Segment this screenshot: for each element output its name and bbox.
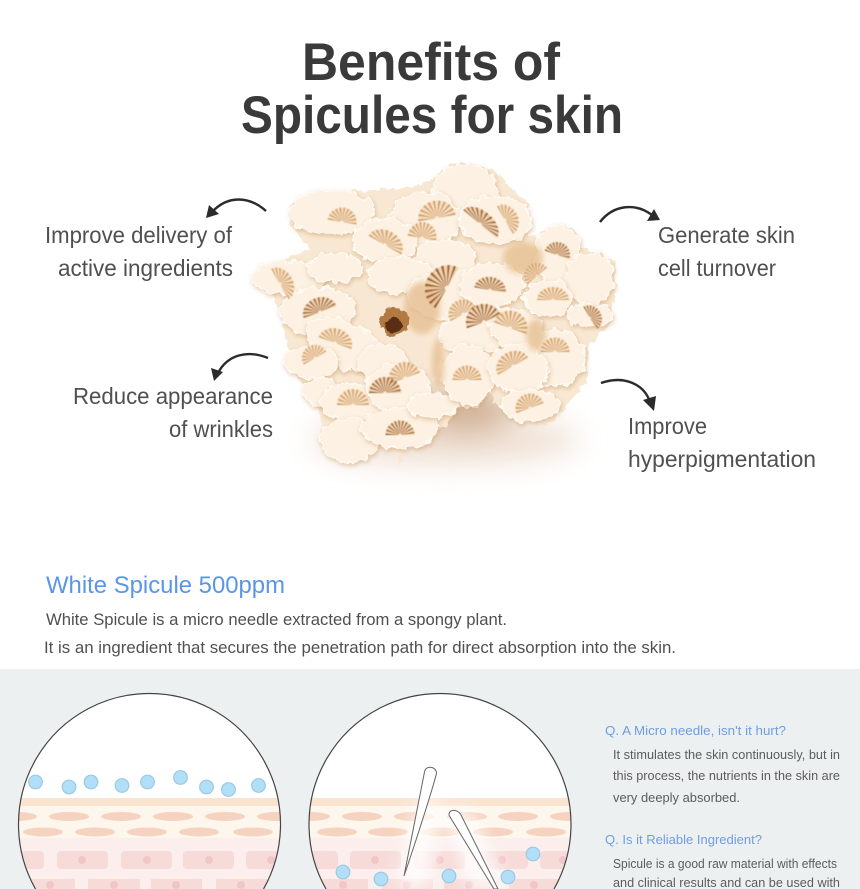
diagram: skin before	[18, 692, 282, 889]
diagram: skin with spicules	[308, 692, 572, 889]
arrow: improve delivery	[206, 200, 266, 218]
description text	[44, 610, 676, 657]
arrow: hyperpigmentation	[601, 380, 656, 411]
needle: lower spicule	[449, 810, 498, 889]
answer two: Spicule is a good raw material with effects	[613, 856, 837, 871]
label: reduce wrinkles	[73, 383, 273, 442]
answer one: very deeply absorbed.	[613, 790, 740, 805]
title: Spicules for skin	[241, 86, 623, 145]
label: generate turnover: Generate skin	[658, 222, 795, 248]
label: hyperpigmentation: hyperpigmentation	[628, 446, 816, 472]
label: reduce wrinkles: of wrinkles	[169, 416, 273, 442]
arrow: reduce wrinkles	[211, 354, 268, 381]
heading: white spicule: White Spicule 500ppm	[46, 572, 285, 599]
arrow: cell turnover	[600, 207, 660, 222]
label: generate turnover	[658, 222, 795, 281]
label: hyperpigmentation	[628, 413, 816, 472]
spicule sponge photo	[250, 160, 615, 466]
description text: White Spicule is a micro needle extracted from a spongy plant.	[46, 610, 507, 629]
title: Benefits of	[302, 33, 560, 92]
label: reduce wrinkles: Reduce appearance	[73, 383, 273, 409]
label: hyperpigmentation: Improve	[628, 413, 707, 439]
description text: It is an ingredient that secures the penetration path for direct absorption into the skin.	[44, 638, 676, 657]
nutrient dots	[336, 847, 540, 886]
title	[241, 33, 623, 145]
label: improve delivery	[45, 222, 233, 281]
label: generate turnover: cell turnover	[658, 255, 776, 281]
label: improve delivery: Improve delivery of	[45, 222, 233, 248]
answer one	[613, 747, 840, 805]
label: improve delivery: active ingredients	[58, 255, 233, 281]
answer one: this process, the nutrients in the skin are	[613, 768, 840, 783]
answer one: It stimulates the skin continuously, but in	[613, 747, 840, 762]
q and a text	[605, 723, 840, 889]
answer two	[613, 856, 840, 889]
needle: upper spicule	[404, 767, 436, 876]
penetration glow	[398, 800, 505, 889]
question two: Q. Is it Reliable Ingredient?	[605, 832, 762, 847]
nutrient dots	[29, 771, 265, 796]
panel: grey background	[0, 669, 860, 889]
question one: Q. A Micro needle, isn't it hurt?	[605, 723, 786, 738]
